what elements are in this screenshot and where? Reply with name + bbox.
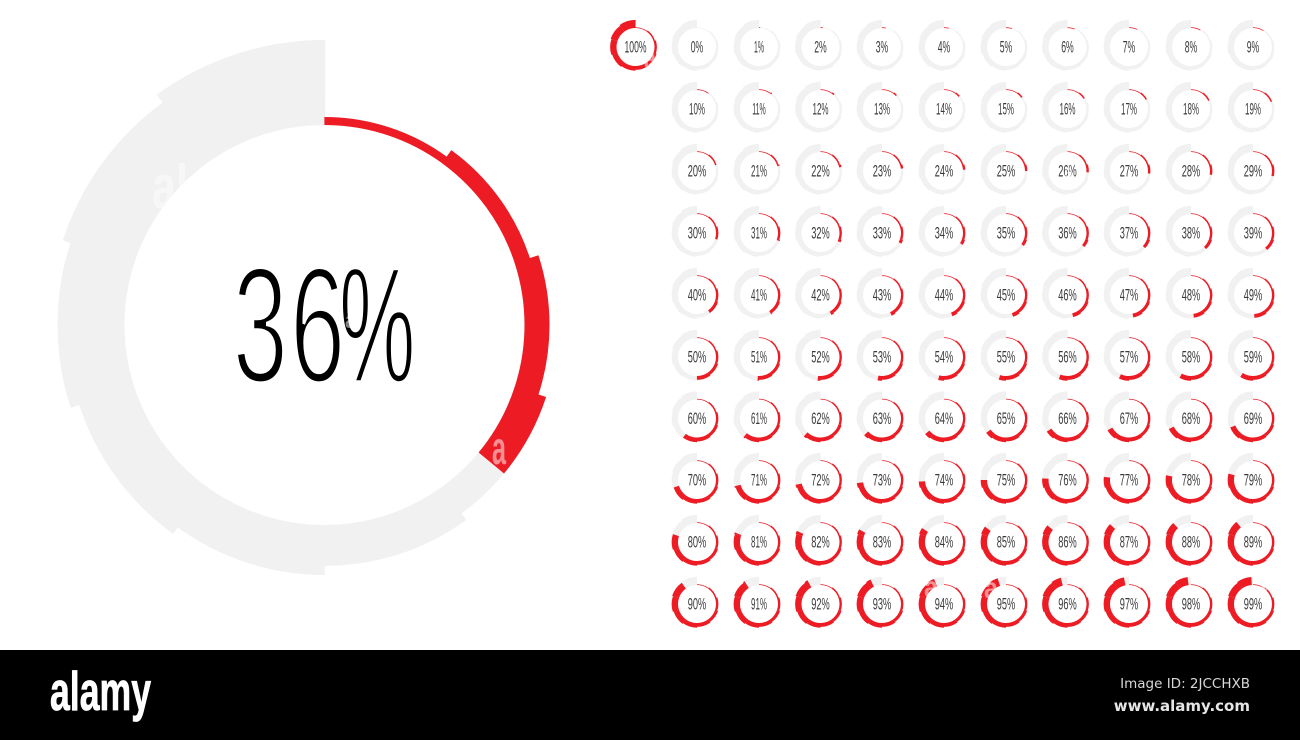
gauge 95%: 95% [997,596,1015,614]
gauge 89%: 89% [1244,534,1262,552]
gauge 70%: 70% [688,472,706,490]
gauge 90% [665,572,729,636]
small gauge watermarks: a [1261,565,1272,598]
large gauge value [233,233,415,417]
gauge 61% [727,386,791,451]
gauge 12%: 12% [812,100,829,118]
gauge 22% [788,139,853,203]
gauge 66%: 66% [1058,410,1077,428]
gauge 71%: 71% [751,472,767,490]
gauge 6%: 6% [1061,38,1074,56]
gauge 80% [665,510,729,574]
gauge 15%: 15% [998,100,1014,118]
gauge 36% [1035,201,1100,265]
gauge 97%: 97% [1120,596,1138,614]
gauge 76%: 76% [1058,472,1077,490]
gauge 53%: 53% [873,348,891,366]
gauge 72%: 72% [811,472,830,490]
gauge 49% [1221,263,1285,327]
gauge 18% [1159,77,1223,141]
gauge 44%: 44% [935,286,953,304]
gauge 92% [788,572,853,636]
gauge 74%: 74% [935,472,953,490]
gauge 33%: 33% [873,224,891,242]
gauge 26% [1035,139,1100,203]
gauge 66% [1035,386,1100,451]
gauge 78% [1159,448,1223,512]
gauge 27%: 27% [1120,162,1138,180]
gauge 79%: 79% [1244,472,1262,490]
gauge 54% [912,325,976,389]
gauge 99% [1221,572,1285,636]
gauge 26%: 26% [1058,162,1077,180]
gauge 87% [1097,510,1161,574]
gauge 65% [974,386,1038,451]
gauge 62% [788,386,853,451]
gauge 3%: 3% [876,38,888,56]
gauge 55%: 55% [997,348,1015,366]
gauge 37% [1097,201,1161,265]
gauge 71% [727,448,791,512]
gauge 70% [665,448,729,512]
gauge 98%: 98% [1182,596,1200,614]
gauge 48%: 48% [1182,286,1200,304]
gauge 60%: 60% [688,410,706,428]
gauge 39% [1221,201,1285,265]
gauge 1% [727,15,791,79]
gauge 41% [727,263,791,327]
small gauge watermarks [644,42,1272,605]
gauge 93%: 93% [873,596,891,614]
gauge 68%: 68% [1182,410,1200,428]
small gauge watermarks: a [984,572,998,605]
gauge 51%: 51% [751,348,767,366]
gauge 94% [912,572,976,636]
watermark on value: a [345,307,358,334]
gauge 32% [788,201,853,265]
gauge 97% [1097,572,1161,636]
gauge 96%: 96% [1058,596,1077,614]
gauge 17%: 17% [1121,100,1137,118]
gauge 47% [1097,263,1161,327]
gauge 33% [850,201,914,265]
gauge 83%: 83% [873,534,891,552]
gauge 3% [850,15,914,79]
large gauge value: 36 [233,233,345,417]
gauge 13%: 13% [874,100,890,118]
gauge 67%: 67% [1120,410,1138,428]
gauge 35%: 35% [997,224,1015,242]
gauge 100% [603,15,668,79]
gauge 16% [1035,77,1100,141]
gauge 64% [912,386,976,451]
gauge 4%: 4% [938,38,950,56]
gauge 0%: 0% [691,38,703,56]
gauge 40% [665,263,729,327]
small gauge grid [603,15,1285,636]
gauge 29%: 29% [1244,162,1262,180]
gauge 25% [974,139,1038,203]
gauge 69% [1221,386,1285,451]
gauge 79% [1221,448,1285,512]
gauge 94%: 94% [935,596,953,614]
gauge 68% [1159,386,1223,451]
gauge 82%: 82% [811,534,830,552]
gauge 60% [665,386,729,451]
gauge 30% [665,201,729,265]
gauge 24% [912,139,976,203]
gauge 9%: 9% [1247,38,1259,56]
gauge 37%: 37% [1120,224,1138,242]
small gauge watermarks: a [644,42,656,75]
gauge 35% [974,201,1038,265]
gauge 58% [1159,325,1223,389]
gauge 20%: 20% [688,162,706,180]
gauge 27% [1097,139,1161,203]
gauge 50%: 50% [688,348,706,366]
gauge 81% [727,510,791,574]
gauge 7%: 7% [1123,38,1135,56]
gauge 28%: 28% [1182,162,1200,180]
gauge 48% [1159,263,1223,327]
gauge 62%: 62% [811,410,830,428]
gauge 45%: 45% [997,286,1015,304]
website: www.alamy.com [1114,697,1250,715]
gauge 81%: 81% [751,534,767,552]
gauge 34% [912,201,976,265]
gauge 36%: 36% [1058,224,1077,242]
gauge 28% [1159,139,1223,203]
gauge 100%: 100% [624,38,647,56]
large gauge ring [0,0,663,664]
gauge 19%: 19% [1245,100,1261,118]
footer bar [0,650,1300,740]
gauge 51% [727,325,791,389]
gauge 47%: 47% [1120,286,1138,304]
gauge 93% [850,572,914,636]
gauge 99%: 99% [1244,596,1262,614]
gauge 92%: 92% [811,596,830,614]
gauge 32%: 32% [811,224,830,242]
gauge 49%: 49% [1244,286,1262,304]
gauge 10%: 10% [689,100,705,118]
gauge 57%: 57% [1120,348,1138,366]
gauge 54%: 54% [935,348,953,366]
gauge 21%: 21% [751,162,767,180]
gauge 23% [850,139,914,203]
gauge 77%: 77% [1120,472,1138,490]
gauge 85%: 85% [997,534,1015,552]
gauge 95% [974,572,1038,636]
gauge 38% [1159,201,1223,265]
gauge 64%: 64% [935,410,953,428]
gauge 63%: 63% [873,410,891,428]
gauge 52%: 52% [811,348,830,366]
gauge 87%: 87% [1120,534,1138,552]
gauge 43% [850,263,914,327]
gauge 8% [1159,15,1223,79]
gauge 80%: 80% [688,534,706,552]
gauge 8%: 8% [1185,38,1197,56]
gauge 31% [727,201,791,265]
gauge 59% [1221,325,1285,389]
small gauge watermarks: a [924,571,938,604]
large gauge value: % [339,233,415,417]
gauge 89% [1221,510,1285,574]
watermark on grey ring: al [152,153,188,222]
gauge 46%: 46% [1058,286,1077,304]
gauge 58%: 58% [1182,348,1200,366]
gauge 84%: 84% [935,534,953,552]
gauge 44% [912,263,976,327]
gauge 22%: 22% [811,162,830,180]
gauge 11%: 11% [752,100,766,118]
gauge 20% [665,139,729,203]
gauge 10% [665,77,729,141]
gauge 43%: 43% [873,286,891,304]
gauge 31%: 31% [751,224,767,242]
gauge 19% [1221,77,1285,141]
gauge 2%: 2% [814,38,827,56]
gauge 18%: 18% [1183,100,1199,118]
gauge 96% [1035,572,1100,636]
gauge 23%: 23% [873,162,891,180]
gauge 83% [850,510,914,574]
large gauge: 36% [0,0,663,664]
gauge 12% [788,77,853,141]
gauge 67% [1097,386,1161,451]
gauge 42%: 42% [811,286,830,304]
small gauge watermarks: a [1064,162,1074,182]
gauge 88% [1159,510,1223,574]
gauge 61%: 61% [751,410,767,428]
gauge 63% [850,386,914,451]
gauge 75% [974,448,1038,512]
gauge 17% [1097,77,1161,141]
gauge 38%: 38% [1182,224,1200,242]
gauge 34%: 34% [935,224,953,242]
gauge 53% [850,325,914,389]
gauge 24%: 24% [935,162,953,180]
gauge 56%: 56% [1058,348,1077,366]
gauge 73% [850,448,914,512]
gauge 25%: 25% [997,162,1015,180]
watermark on red ring: a [492,422,506,474]
gauge 88%: 88% [1182,534,1200,552]
gauge 59%: 59% [1244,348,1262,366]
gauge 84% [912,510,976,574]
gauge 16%: 16% [1060,100,1076,118]
gauge 82% [788,510,853,574]
gauge 4% [912,15,976,79]
gauge 72% [788,448,853,512]
gauge 69%: 69% [1244,410,1262,428]
gauge 86%: 86% [1058,534,1077,552]
gauge 14%: 14% [936,100,952,118]
gauge 5% [974,15,1038,79]
gauge 39%: 39% [1244,224,1262,242]
gauge 41%: 41% [751,286,767,304]
gauge 91%: 91% [751,596,767,614]
gauge 15% [974,77,1038,141]
gauge 85% [974,510,1038,574]
gauge 86% [1035,510,1100,574]
gauge 74% [912,448,976,512]
gauge 56% [1035,325,1100,389]
gauge 76% [1035,448,1100,512]
gauge 2% [788,15,853,79]
gauge 45% [974,263,1038,327]
gauge 0% [665,15,729,79]
gauge 52% [788,325,853,389]
gauge 11% [727,77,791,141]
gauge 57% [1097,325,1161,389]
gauge 90%: 90% [688,596,706,614]
gauge 1%: 1% [754,38,764,56]
gauge 50% [665,325,729,389]
gauge 40%: 40% [688,286,706,304]
gauge 13% [850,77,914,141]
gauge 21% [727,139,791,203]
gauge 75%: 75% [997,472,1015,490]
gauge 46% [1035,263,1100,327]
image ID: Image ID: 2JCCHXB [1120,676,1250,692]
gauge 29% [1221,139,1285,203]
gauge 30%: 30% [688,224,706,242]
gauge 42% [788,263,853,327]
gauge 91% [727,572,791,636]
gauge 9% [1221,15,1285,79]
gauge 78%: 78% [1182,472,1200,490]
gauge 73%: 73% [873,472,891,490]
gauge 55% [974,325,1038,389]
alamy logo: alamy [50,660,151,722]
gauge 98% [1159,572,1223,636]
gauge 5%: 5% [1000,38,1012,56]
gauge 65%: 65% [997,410,1015,428]
gauge 7% [1097,15,1161,79]
gauge 6% [1035,15,1100,79]
gauge 14% [912,77,976,141]
gauge 77% [1097,448,1161,512]
